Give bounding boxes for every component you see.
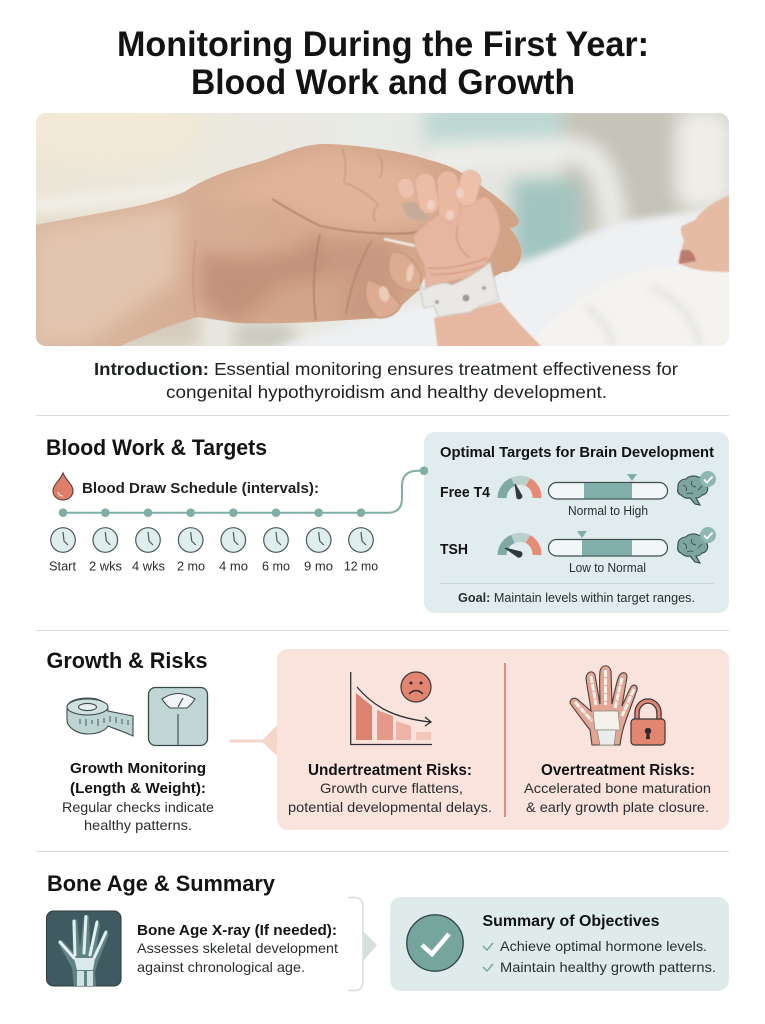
schedule labels: 6 mo <box>262 560 290 574</box>
panel heading: Optimal Targets for Brain Development <box>440 444 714 461</box>
baby face <box>678 195 730 272</box>
growth monitoring text: healthy patterns. <box>84 817 192 833</box>
schedule labels: 2 wks <box>89 560 122 574</box>
icon: measuring tape <box>67 698 133 736</box>
adult lower fingers <box>366 252 421 318</box>
panel: summary of objectives <box>390 897 729 991</box>
undertreatment text: Undertreatment Risks: <box>308 762 472 779</box>
schedule labels <box>49 560 378 574</box>
icon: blood drop <box>53 473 73 500</box>
schedule labels: Start <box>49 560 77 574</box>
panel: treatment risks <box>277 649 729 830</box>
heading: Growth & Risks: Growth & Risks <box>46 648 208 673</box>
icon: hand bones <box>570 666 637 745</box>
icon: brain with check <box>678 527 716 563</box>
heading: Bone Age & Summary: Bone Age & Summary <box>47 871 276 896</box>
schedule labels: 2 mo <box>177 560 205 574</box>
tsh label: TSH <box>440 542 468 558</box>
objective two: Maintain healthy growth patterns. <box>500 959 716 975</box>
range label: normal to high: Normal to High <box>568 504 648 518</box>
schedule labels: 4 wks <box>132 560 165 574</box>
bone age x-ray text: Bone Age X-ray (If needed): <box>137 923 337 939</box>
title <box>117 25 649 102</box>
overtreatment text: & early growth plate closure. <box>526 799 709 815</box>
schedule labels: 4 mo <box>219 560 248 574</box>
baby hand <box>396 168 545 350</box>
photo: adult hand holding newborn hand with hospital wristband <box>36 113 729 346</box>
wristband <box>419 262 499 317</box>
overtreatment text <box>524 762 711 815</box>
introduction text: Introduction: Essential monitoring ensures treatment effectiveness for <box>94 359 678 379</box>
growth monitoring text <box>62 761 214 833</box>
free t4 label: Free T4 <box>440 485 490 501</box>
overtreatment text: Overtreatment Risks: <box>541 762 695 779</box>
adult thumb nail <box>402 202 429 221</box>
schedule clocks <box>51 528 373 552</box>
icon: brain with check <box>678 471 716 505</box>
gauge: free t4 <box>502 480 537 499</box>
growth monitoring text: Growth Monitoring <box>70 761 206 777</box>
undertreatment text <box>288 762 492 815</box>
growth monitoring text: (Length & Weight): <box>70 781 206 797</box>
goal text: Goal: Maintain levels within target ranges. <box>458 590 695 605</box>
chart: declining growth curve <box>351 672 432 744</box>
icon: padlock <box>631 701 665 745</box>
adult hand <box>30 140 530 350</box>
icon: check circle <box>407 915 463 971</box>
summary heading: Summary of Objectives <box>482 913 660 930</box>
timeline connector <box>59 471 424 517</box>
icon: hand x-ray <box>46 911 121 986</box>
icon: weighing scale <box>148 688 208 746</box>
heading: Blood Work & Targets: Blood Work & Targets <box>46 435 267 460</box>
growth monitoring text: Regular checks indicate <box>62 799 214 815</box>
target bar: tsh <box>548 531 668 556</box>
gauge: tsh <box>502 537 537 557</box>
panel: optimal targets <box>420 432 729 613</box>
overtreatment text: Accelerated bone maturation <box>524 780 711 796</box>
connector: monitoring to risks <box>230 725 278 756</box>
icon: sad face <box>401 672 431 702</box>
bone age x-ray text <box>137 923 338 975</box>
range label: low to normal: Low to Normal <box>569 561 646 575</box>
target bar: free t4 <box>548 474 668 499</box>
bone age x-ray text: Assesses skeletal development <box>137 940 338 956</box>
subheading: blood draw schedule: Blood Draw Schedule (intervals): <box>82 480 319 497</box>
undertreatment text: Growth curve flattens, <box>320 780 463 796</box>
title: Monitoring During the First Year: <box>117 25 649 64</box>
schedule labels: 9 mo <box>304 560 333 574</box>
objective one: Achieve optimal hormone levels. <box>500 938 707 954</box>
introduction text <box>94 359 678 402</box>
bone age x-ray text: against chronological age. <box>137 959 305 975</box>
bracket arrow <box>348 898 377 990</box>
introduction text: congenital hypothyroidism and healthy development. <box>166 382 607 402</box>
undertreatment text: potential developmental delays. <box>288 799 492 815</box>
schedule labels: 12 mo <box>344 560 378 574</box>
title: Blood Work and Growth <box>191 63 575 102</box>
